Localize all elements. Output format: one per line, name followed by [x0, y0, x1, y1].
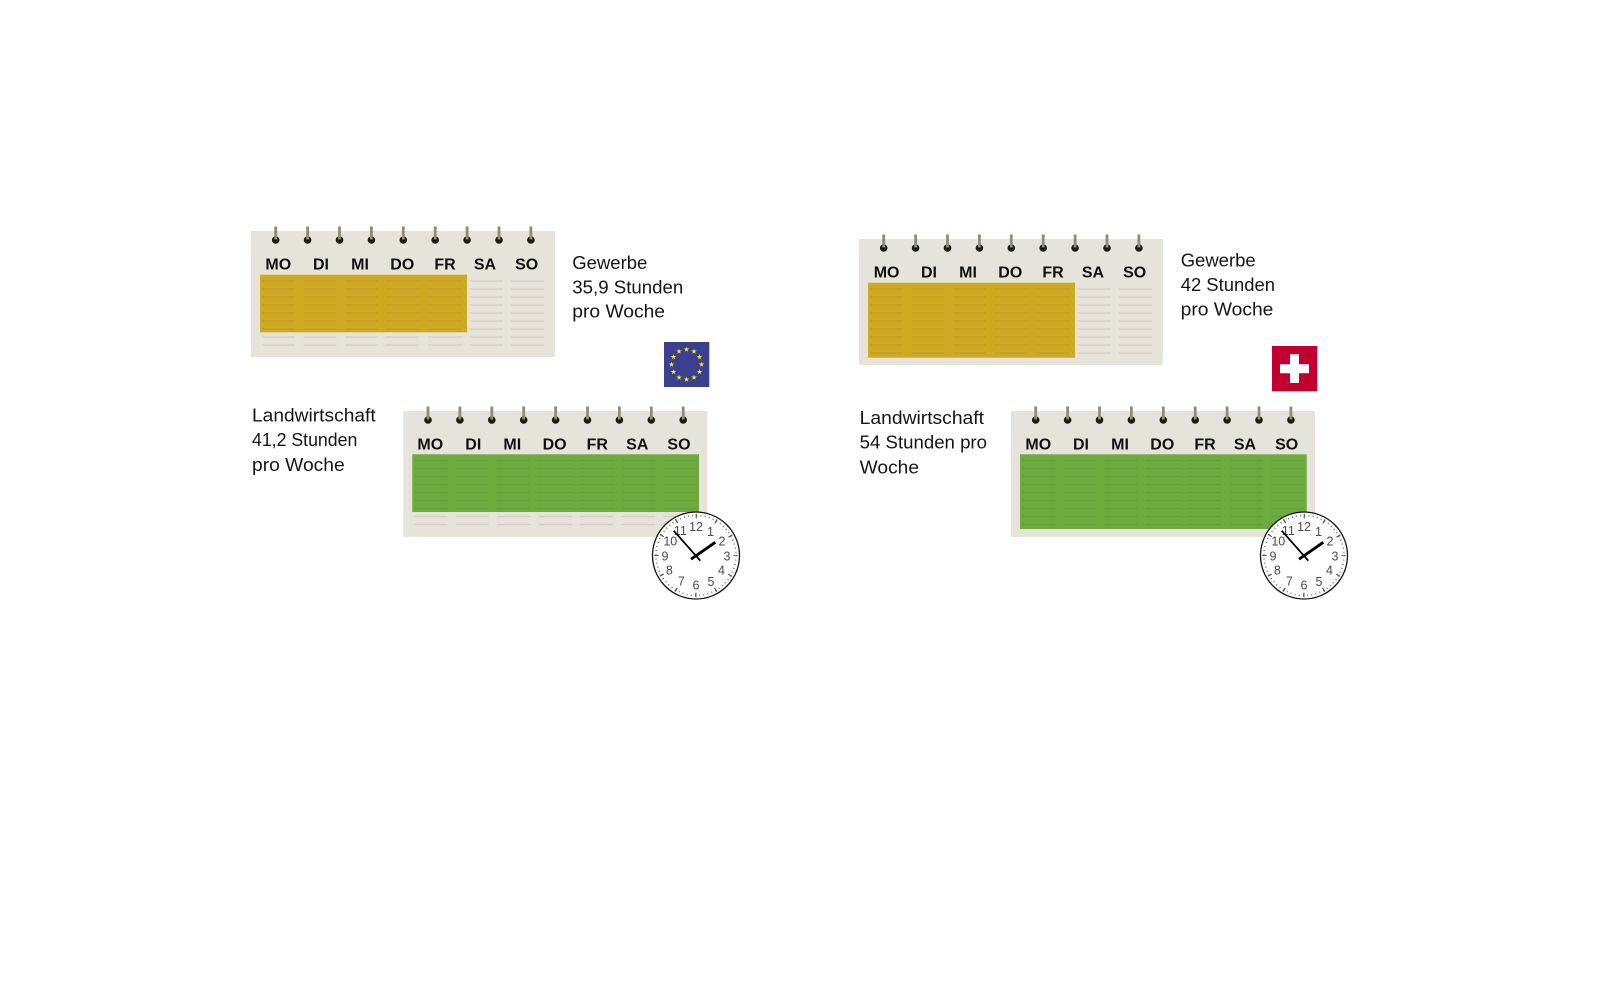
- text: CH Landwirtschaft caption: Landwirtschaft: [860, 407, 984, 428]
- icon: clock EU: 6: [693, 578, 700, 592]
- icon: clock CH: 2: [1327, 534, 1334, 548]
- weekday labels: FR: [1042, 264, 1064, 281]
- text: EU Gewerbe caption: [572, 252, 683, 322]
- icon: clock CH: 10: [1271, 534, 1285, 548]
- icon: clock EU: 4: [718, 564, 725, 578]
- icon: clock CH: 5: [1316, 575, 1323, 589]
- calendar spiral rings: [424, 406, 687, 424]
- weekday labels: DO: [543, 436, 567, 453]
- weekday labels: FR: [587, 436, 608, 453]
- weekday labels: DO: [1150, 436, 1174, 453]
- icon: EU flag: [664, 342, 709, 387]
- text: EU Gewerbe caption: pro Woche: [572, 300, 665, 322]
- weekday labels: MO: [417, 436, 443, 453]
- text: CH Gewerbe caption: 42 Stunden: [1181, 274, 1275, 295]
- icon: clock CH: 6: [1301, 578, 1308, 592]
- text: CH Gewerbe caption: pro Woche: [1181, 299, 1273, 320]
- weekday labels: SA: [474, 257, 497, 274]
- icon: clock EU: 8: [666, 564, 673, 578]
- icon: clock EU: 9: [662, 550, 669, 564]
- weekday labels: DO: [998, 264, 1022, 281]
- highlighted working hours block: [1020, 454, 1307, 529]
- text: CH Landwirtschaft caption: Woche: [860, 456, 919, 477]
- panel: CH Gewerbe calendar: [859, 234, 1163, 365]
- weekday labels: SA: [1082, 264, 1105, 281]
- icon: clock CH: 12: [1297, 520, 1311, 534]
- weekday labels: SO: [667, 436, 691, 453]
- icon: clock EU: [652, 512, 740, 599]
- calendar spiral rings: [1032, 406, 1295, 424]
- icon: clock CH: 3: [1332, 550, 1339, 564]
- weekday labels: SA: [1234, 436, 1257, 453]
- weekday labels: SO: [1123, 264, 1146, 281]
- panel: EU Landwirtschaft calendar: [403, 406, 707, 537]
- weekday labels: MI: [503, 436, 521, 453]
- weekday labels: MO: [874, 264, 899, 281]
- weekday labels: MI: [1111, 436, 1129, 453]
- text: EU Landwirtschaft caption: [252, 405, 376, 475]
- icon: clock EU: 3: [724, 550, 731, 564]
- icon: clock EU: 5: [708, 575, 715, 589]
- weekday labels: [874, 264, 1146, 281]
- icon: clock EU: 7: [678, 574, 685, 588]
- calendar spiral rings: [880, 234, 1143, 252]
- weekday labels: MO: [1025, 436, 1051, 453]
- weekday labels: [265, 257, 538, 274]
- weekday labels: MI: [351, 257, 369, 274]
- icon: clock CH: 9: [1270, 550, 1277, 564]
- weekday labels: SO: [1275, 436, 1298, 453]
- icon: Swiss flag: [1272, 346, 1317, 391]
- weekday labels: SA: [626, 436, 649, 453]
- text: EU Landwirtschaft caption: Landwirtschaft: [252, 405, 376, 426]
- icon: clock CH: 1: [1315, 525, 1322, 539]
- text: CH Landwirtschaft caption: 54 Stunden pro: [860, 432, 987, 453]
- icon: clock CH: 11: [1282, 524, 1295, 538]
- icon: clock EU: 12: [689, 520, 703, 534]
- text: EU Landwirtschaft caption: 41,2 Stunden: [252, 429, 357, 450]
- text: CH Gewerbe caption: Gewerbe: [1181, 250, 1256, 271]
- calendar spiral rings: [272, 226, 535, 244]
- weekday labels: DI: [465, 436, 481, 453]
- icon: clock CH: [1260, 512, 1348, 599]
- text: CH Landwirtschaft caption: [860, 407, 987, 477]
- weekday labels: FR: [1194, 436, 1216, 453]
- icon: clock CH: 4: [1326, 564, 1333, 578]
- weekday labels: FR: [434, 257, 456, 274]
- weekday labels: DI: [1073, 436, 1089, 453]
- icon: clock EU: 10: [663, 534, 677, 548]
- highlighted working hours block: [260, 275, 467, 332]
- weekday labels: DO: [390, 257, 414, 274]
- weekday labels: MO: [265, 257, 291, 274]
- highlighted working hours block: [868, 283, 1075, 358]
- weekday labels: DI: [313, 257, 329, 274]
- icon: clock EU: 11: [674, 524, 687, 538]
- icon: clock EU: 1: [707, 525, 714, 539]
- highlighted working hours block: [412, 454, 699, 512]
- text: EU Landwirtschaft caption: pro Woche: [252, 454, 345, 475]
- icon: clock CH: 7: [1286, 574, 1293, 588]
- text: EU Gewerbe caption: Gewerbe: [572, 252, 647, 273]
- weekday labels: MI: [959, 264, 977, 281]
- text: CH Gewerbe caption: [1181, 250, 1275, 320]
- weekday labels: [1025, 436, 1298, 453]
- weekday labels: SO: [515, 257, 538, 274]
- icon: clock EU: 2: [719, 534, 726, 548]
- text: EU Gewerbe caption: 35,9 Stunden: [572, 276, 683, 297]
- panel: CH Landwirtschaft calendar: [1011, 406, 1315, 537]
- panel: EU Gewerbe calendar: [251, 226, 555, 357]
- weekday labels: [417, 436, 691, 453]
- icon: clock CH: 8: [1274, 564, 1281, 578]
- weekday labels: DI: [921, 264, 937, 281]
